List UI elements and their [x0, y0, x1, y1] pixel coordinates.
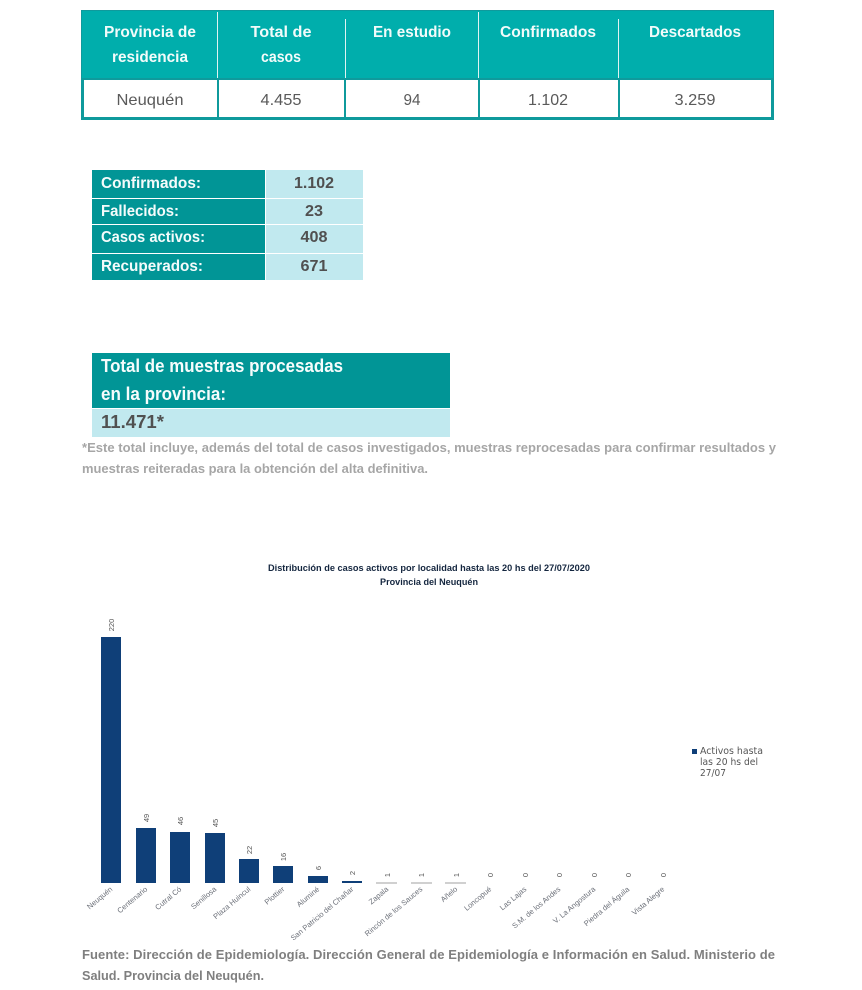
- row: recovered: Recuperados:: [101, 258, 203, 275]
- row: recovered: 671: [300, 258, 328, 275]
- bar chart: active cases by locality: [85, 619, 668, 942]
- locality labels: Neuquén: [85, 885, 114, 911]
- column header: province: Provincia de: [104, 24, 196, 41]
- value labels: 0: [521, 873, 530, 877]
- locality labels: Plottier: [263, 884, 287, 907]
- cell: discarded value: 3.259: [674, 92, 716, 109]
- chart legend: [692, 746, 763, 779]
- value labels: 1: [452, 873, 461, 877]
- row: active cases: Casos activos:: [101, 229, 205, 246]
- value labels: 2: [348, 871, 357, 875]
- locality labels: [85, 884, 666, 942]
- locality labels: Plaza Huincul: [211, 884, 253, 921]
- chart legend: las 20 hs del: [700, 757, 758, 768]
- row: active cases: [101, 229, 328, 246]
- locality labels: Centenario: [115, 885, 149, 915]
- value: total samples: 11.471*: [101, 412, 164, 432]
- column header: confirmed: Confirmados: [500, 24, 596, 41]
- footnote: muestras reiteradas para la obtención del alta definitiva.: [82, 461, 428, 476]
- cell: under study value: 94: [404, 92, 421, 109]
- bars: [101, 637, 466, 884]
- row: deaths: Fallecidos:: [101, 203, 179, 220]
- value labels: 0: [624, 873, 633, 877]
- column header: province: residencia: [112, 49, 188, 66]
- source note: Salud. Provincia del Neuquén.: [82, 968, 264, 983]
- column header: discarded: Descartados: [649, 24, 741, 41]
- chart title: Distribución de casos activos por localidad hasta las 20 hs del 27/07/2020: [268, 563, 590, 574]
- value labels: 22: [245, 846, 254, 854]
- panel: summary table: [92, 170, 363, 280]
- panel: cases by province table: [81, 10, 774, 120]
- locality labels: Piedra del Águila: [582, 884, 632, 928]
- locality labels: Loncopué: [462, 885, 493, 913]
- column header: total cases: Total de: [250, 24, 312, 41]
- column header: total cases: casos: [261, 49, 301, 66]
- value labels: 45: [211, 819, 220, 827]
- locality labels: Cutral Có: [153, 885, 183, 912]
- locality labels: San Patricio del Chañar: [289, 884, 356, 942]
- locality labels: V. La Angostura: [551, 884, 598, 925]
- row: deaths: [101, 203, 323, 220]
- row: recovered: [101, 258, 328, 275]
- footnote: *Este total incluye, además del total de casos investigados, muestras reprocesadas para confirmar resultados y: [82, 440, 777, 455]
- cell: Neuquén: Neuquén: [116, 92, 184, 109]
- row: confirmed: 1.102: [294, 175, 334, 192]
- value labels: 1: [417, 873, 426, 877]
- value labels: 49: [142, 814, 151, 822]
- locality labels: Aluminé: [295, 885, 321, 909]
- value labels: 1: [383, 873, 392, 877]
- column header: under study: En estudio: [373, 24, 451, 41]
- cell: total cases value: 4.455: [260, 92, 302, 109]
- value labels: 6: [314, 866, 323, 870]
- value labels: 220: [107, 619, 116, 631]
- panel: total samples processed: [92, 353, 450, 437]
- value labels: 46: [176, 817, 185, 825]
- row: confirmed: [101, 175, 334, 192]
- locality labels: Añelo: [439, 885, 459, 904]
- value labels: [107, 619, 668, 877]
- source note: Fuente: Dirección de Epidemiología. Dirección General de Epidemiología e Información en Salud. Ministerio de: [82, 947, 775, 962]
- chart legend: Activos hasta: [700, 746, 763, 757]
- locality labels: Vista Alegre: [630, 885, 666, 917]
- value labels: 0: [659, 873, 668, 877]
- chart title: Provincia del Neuquén: [380, 577, 478, 588]
- value labels: 0: [590, 873, 599, 877]
- locality labels: S.M. de los Andes: [510, 884, 562, 930]
- cell: confirmed value: 1.102: [528, 92, 568, 109]
- locality labels: Zapala: [367, 884, 391, 906]
- value labels: 16: [279, 853, 288, 861]
- locality labels: Rincón de los Sauces: [363, 884, 424, 938]
- row: deaths: 23: [305, 203, 323, 220]
- heading: total samples: en la provincia:: [101, 384, 226, 404]
- value labels: 0: [486, 873, 495, 877]
- row: confirmed: Confirmados:: [101, 175, 201, 192]
- chart legend: 27/07: [700, 768, 726, 779]
- row: active cases: 408: [300, 229, 328, 246]
- locality labels: Senillosa: [189, 884, 219, 911]
- value labels: 0: [555, 873, 564, 877]
- locality labels: Las Lajas: [498, 884, 528, 912]
- heading: total samples: Total de muestras procesadas: [101, 356, 343, 376]
